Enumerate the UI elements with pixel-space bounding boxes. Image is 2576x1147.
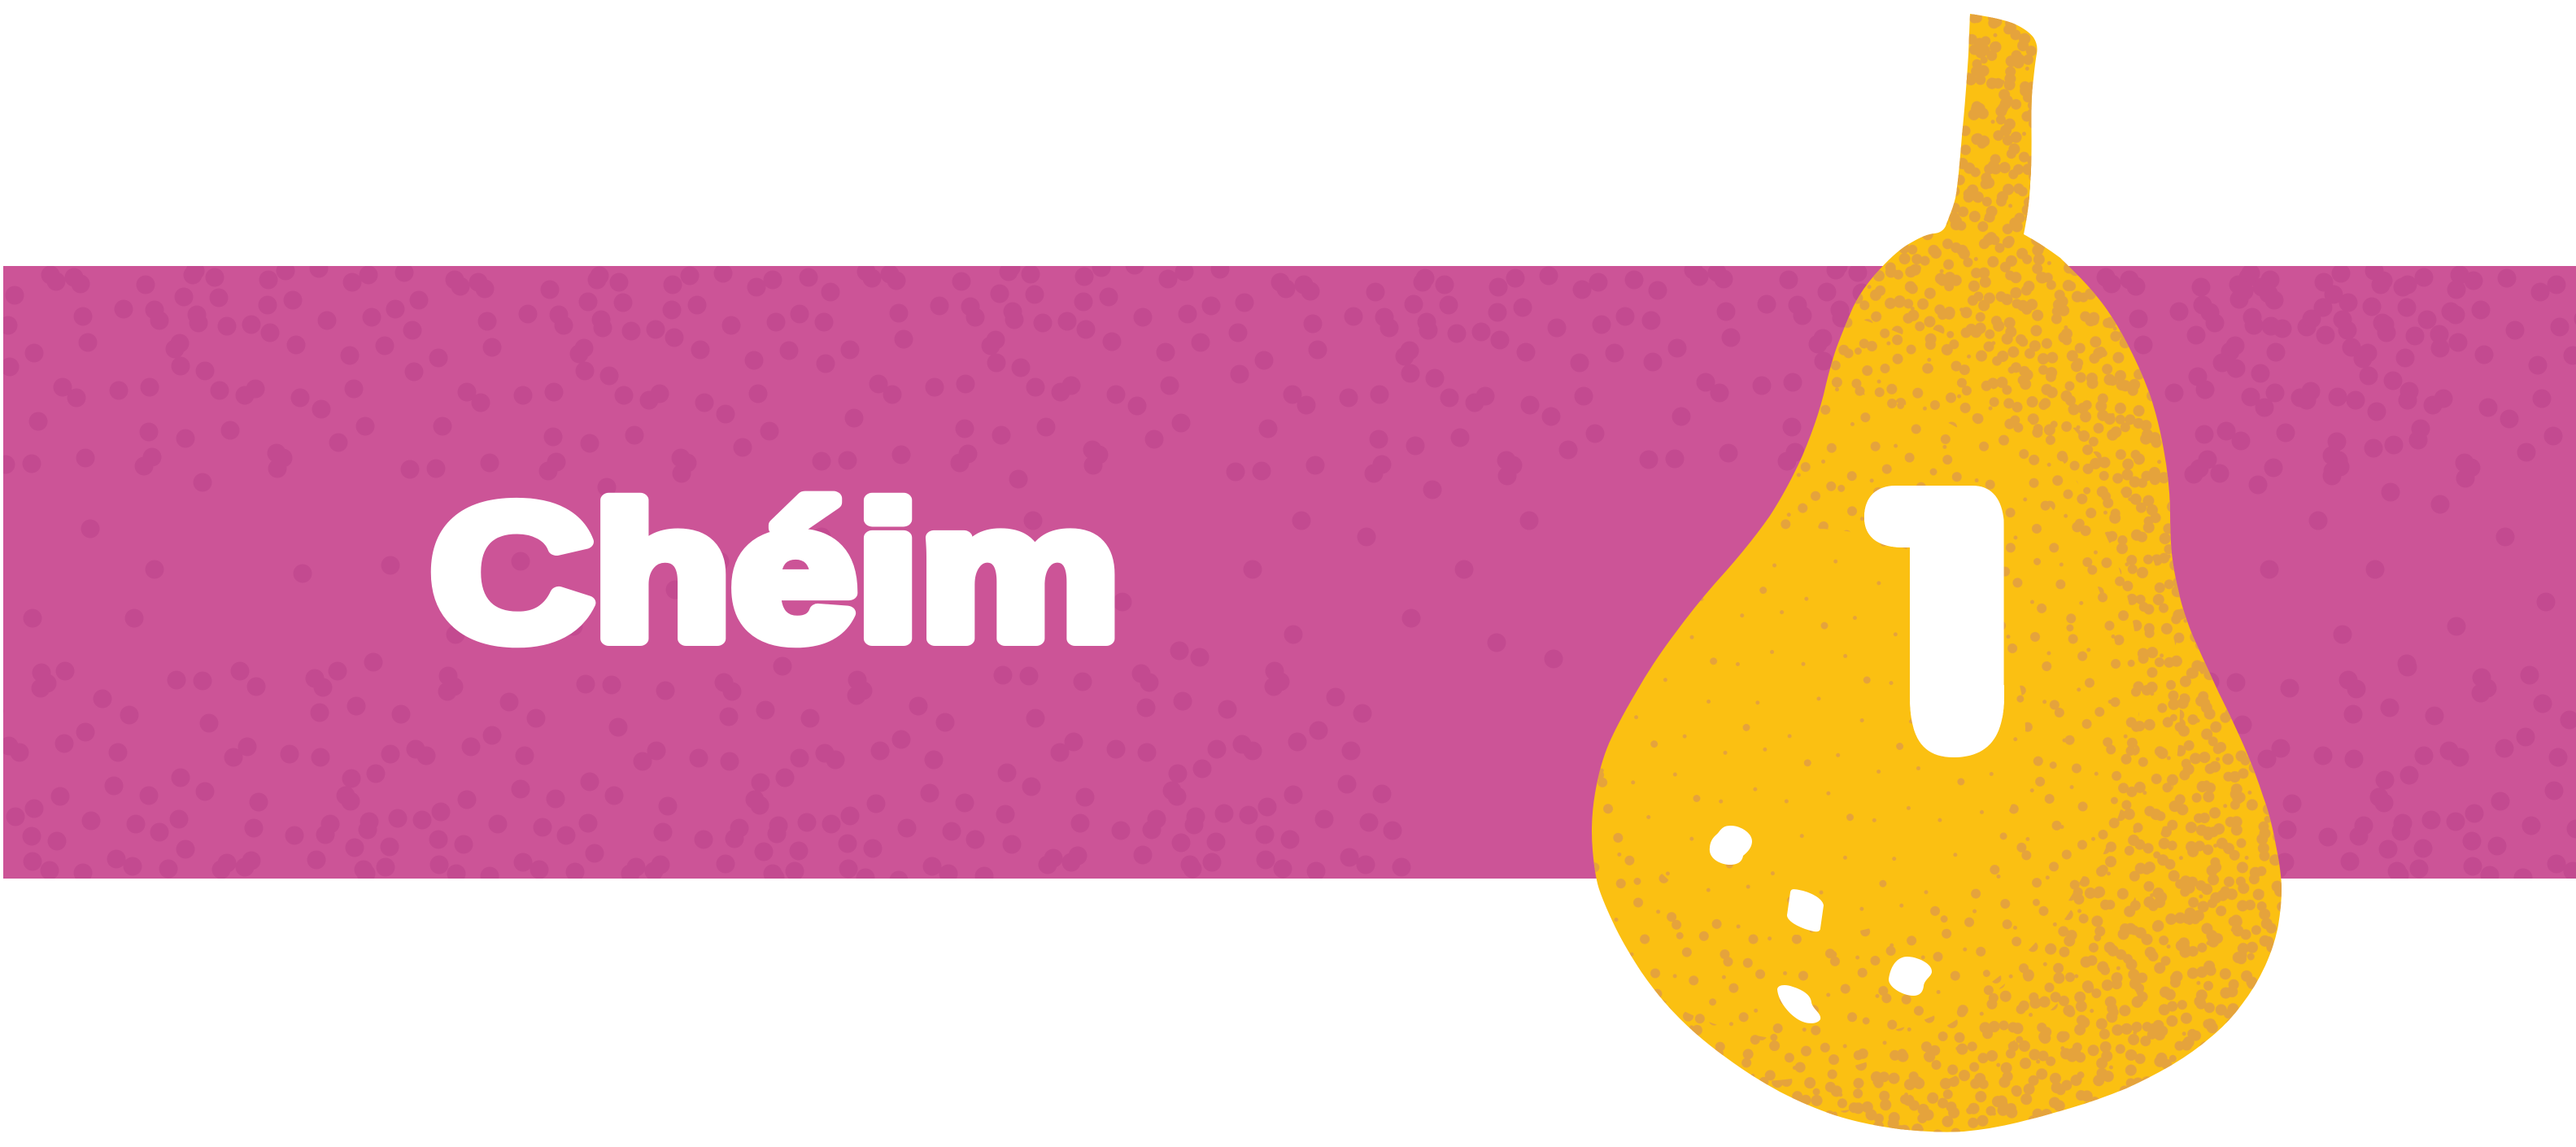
texture: pear skin speckle	[1578, 0, 2294, 1147]
panel: magenta band	[0, 264, 2576, 880]
number: 1	[1864, 486, 2004, 757]
number: 1: 1	[1830, 329, 2067, 848]
texture: darker dots on band	[0, 264, 2576, 880]
icon: yellow pear	[1578, 0, 2294, 1147]
icon: white spots on pear	[1710, 826, 1932, 1023]
heading: Chéim: Chéim	[430, 465, 1120, 679]
